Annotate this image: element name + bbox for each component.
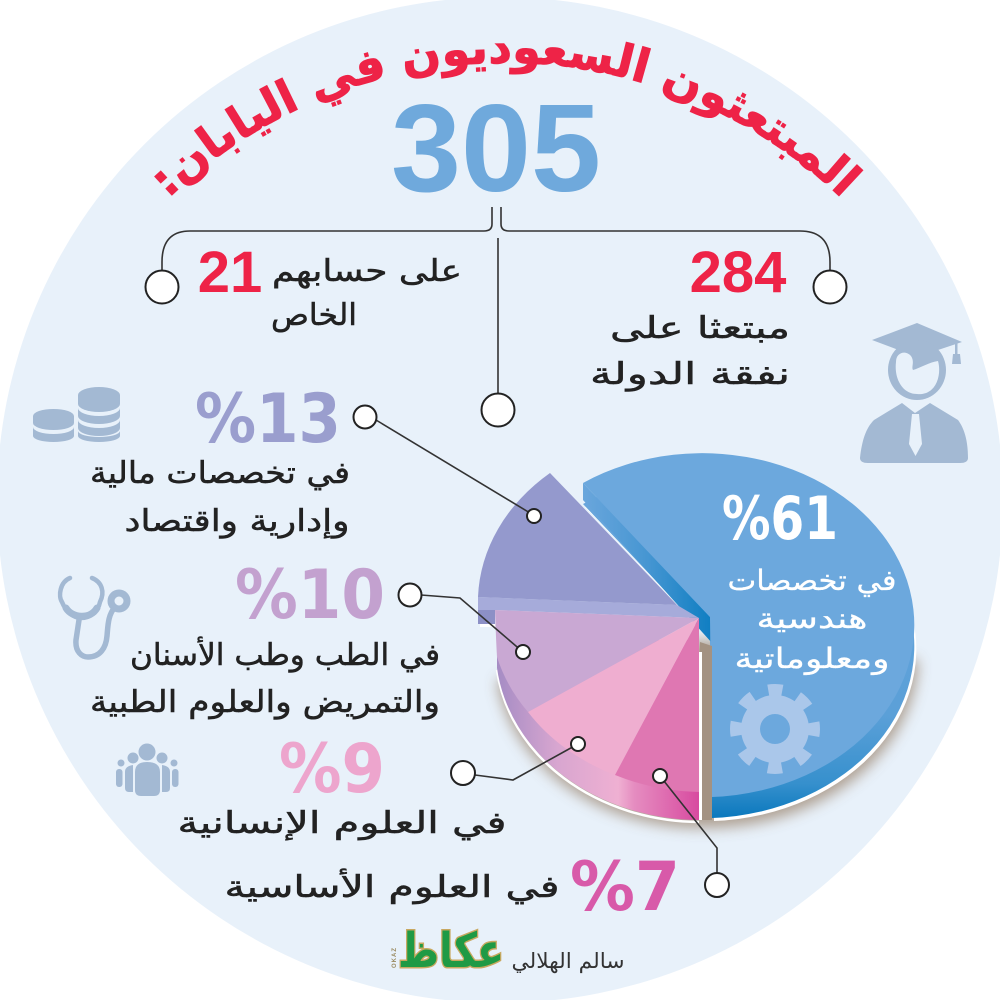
stat: 284 on state funding: مبتعثا على (610, 311, 790, 346)
stat: 21 self-funded: الخاص (271, 298, 357, 333)
title: المبتعثون السعوديون في اليابان: (154, 42, 864, 196)
stat: 284 on state funding (590, 240, 790, 392)
white gap line (699, 652, 702, 820)
purple dark corner (478, 610, 495, 624)
icon: people (116, 744, 178, 796)
stat: 21 self-funded: 21 (198, 240, 262, 305)
stat: 284 on state funding: نفقة الدولة (590, 357, 790, 392)
icon: coins (33, 387, 120, 442)
slice 13% (478, 473, 677, 605)
label 61%: هندسية (756, 602, 868, 635)
slice 9% (528, 618, 699, 775)
stat: 10% medicine: %10 (235, 556, 385, 635)
icon: graduate (860, 323, 968, 463)
slice 7% (615, 618, 699, 792)
stat: 13% finance (90, 380, 350, 539)
stat: 13% finance: %13 (195, 380, 341, 459)
stat: 7% basic sciences (224, 848, 680, 927)
label 61%: ومعلوماتية (734, 642, 890, 675)
stat: 9% humanities: في العلوم الإنسانية (178, 806, 506, 841)
stat: 9% humanities: %9 (279, 730, 385, 809)
leader 10% (398, 584, 530, 659)
node: left (146, 270, 178, 304)
brown gap (700, 642, 712, 820)
pie outline white (585, 477, 916, 821)
pie chart (478, 453, 918, 828)
node: centre (482, 394, 514, 426)
lower-left slices side (497, 640, 699, 820)
logo: OKAZ (392, 947, 398, 968)
logo: عكاظ (398, 923, 504, 979)
leader 7% (653, 769, 729, 897)
stat: 13% finance: وإدارية واقتصاد (124, 504, 350, 539)
pie shadow (497, 640, 918, 828)
blue slice top (583, 453, 914, 797)
white sliver (480, 624, 495, 627)
label 61%: في تخصصات (728, 564, 896, 597)
slice 10% (495, 610, 699, 712)
purple slice side band (478, 597, 699, 624)
blue slice side (583, 474, 914, 818)
stat: 13% finance: في تخصصات مالية (90, 456, 350, 491)
icon: stethoscope (60, 578, 127, 657)
total number 305: 305 (391, 80, 601, 218)
connector: tree lines (162, 207, 830, 395)
stat: 7% basic sciences: في العلوم الأساسية (224, 867, 560, 905)
stat: 10% medicine: في الطب وطب الأسنان (130, 635, 440, 673)
stat: 21 self-funded: على حسابهم (272, 254, 462, 289)
label 61% (722, 484, 896, 675)
credit: سالم الهلالي (512, 949, 624, 974)
stat: 9% humanities (178, 730, 506, 841)
gear icon (736, 690, 814, 768)
stat: 10% medicine: والتمريض والعلوم الطبية (90, 685, 440, 720)
label 61%: %61 (722, 484, 838, 554)
stat: 10% medicine (90, 556, 440, 720)
node: right (814, 270, 846, 304)
lower-left outline (497, 670, 699, 822)
leader 9% (451, 737, 585, 785)
leader 13% (354, 406, 541, 523)
blue slice cut edge (583, 483, 712, 643)
stat: 21 self-funded (198, 240, 462, 333)
stat: 284 on state funding: 284 (690, 240, 786, 305)
stat: 7% basic sciences: %7 (570, 848, 680, 927)
